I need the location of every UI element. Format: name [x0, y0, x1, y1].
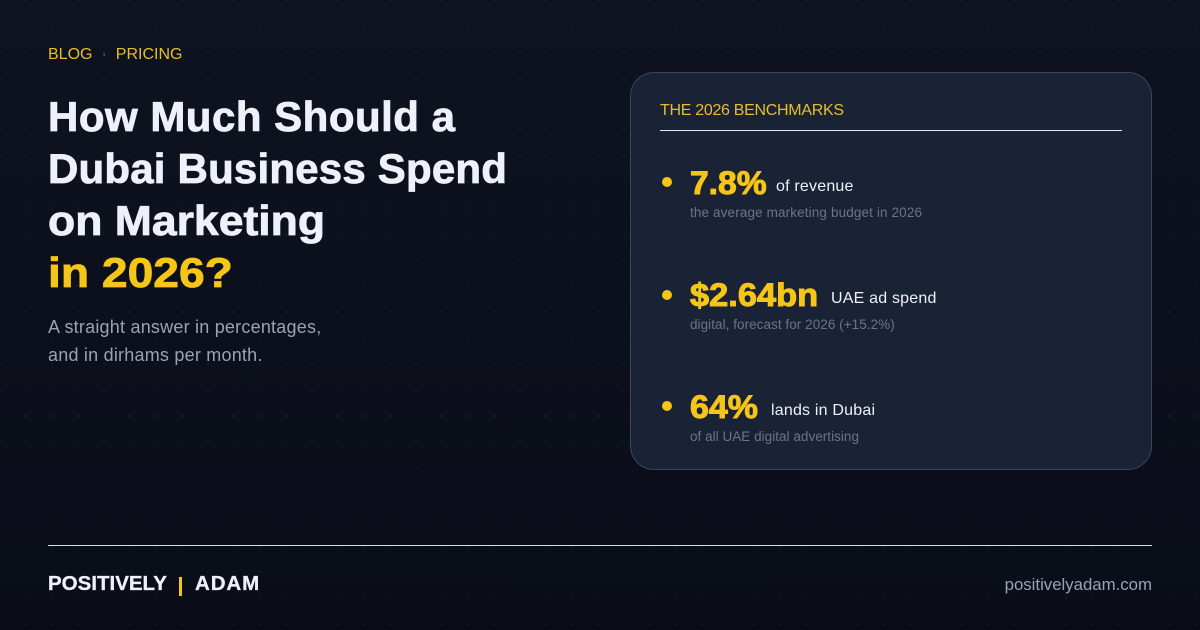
- title: [48, 93, 507, 296]
- stat: revenue share: [662, 165, 922, 220]
- title: How Much Should a: [48, 93, 455, 140]
- stat: revenue share: of revenue: [776, 178, 854, 195]
- footer rule: [48, 545, 1152, 546]
- stat: revenue share: 7.8%: [690, 165, 767, 201]
- brand logo: POSITIVELY: [48, 572, 167, 595]
- stat: UAE ad spend: digital, forecast for 2026 (+15.2%): [690, 317, 895, 332]
- brand logo: ADAM: [195, 572, 260, 595]
- stat: Dubai share: 64%: [690, 389, 758, 425]
- subtitle: A straight answer in percentages,: [48, 317, 321, 337]
- brand logo: [48, 572, 260, 596]
- stat: revenue share: the average marketing budget in 2026: [690, 205, 922, 220]
- panel heading: THE 2026 BENCHMARKS: [660, 102, 844, 119]
- title: in 2026?: [48, 249, 233, 296]
- subtitle: [48, 317, 321, 365]
- panel: benchmarks: [630, 72, 1152, 470]
- stat: Dubai share: of all UAE digital advertising: [690, 429, 859, 444]
- subtitle: and in dirhams per month.: [48, 345, 263, 365]
- stat: UAE ad spend: UAE ad spend: [831, 290, 937, 307]
- website: positivelyadam.com: [1005, 575, 1152, 594]
- stat: Dubai share: [662, 389, 875, 444]
- title: on Marketing: [48, 197, 325, 244]
- stat: Dubai share: lands in Dubai: [771, 402, 875, 419]
- heading rule: [660, 130, 1122, 131]
- eyebrow: category: BLOG · PRICING: [48, 46, 182, 63]
- stat: UAE ad spend: $2.64bn: [690, 277, 818, 313]
- stat: UAE ad spend: [662, 277, 937, 332]
- title: Dubai Business Spend: [48, 145, 507, 192]
